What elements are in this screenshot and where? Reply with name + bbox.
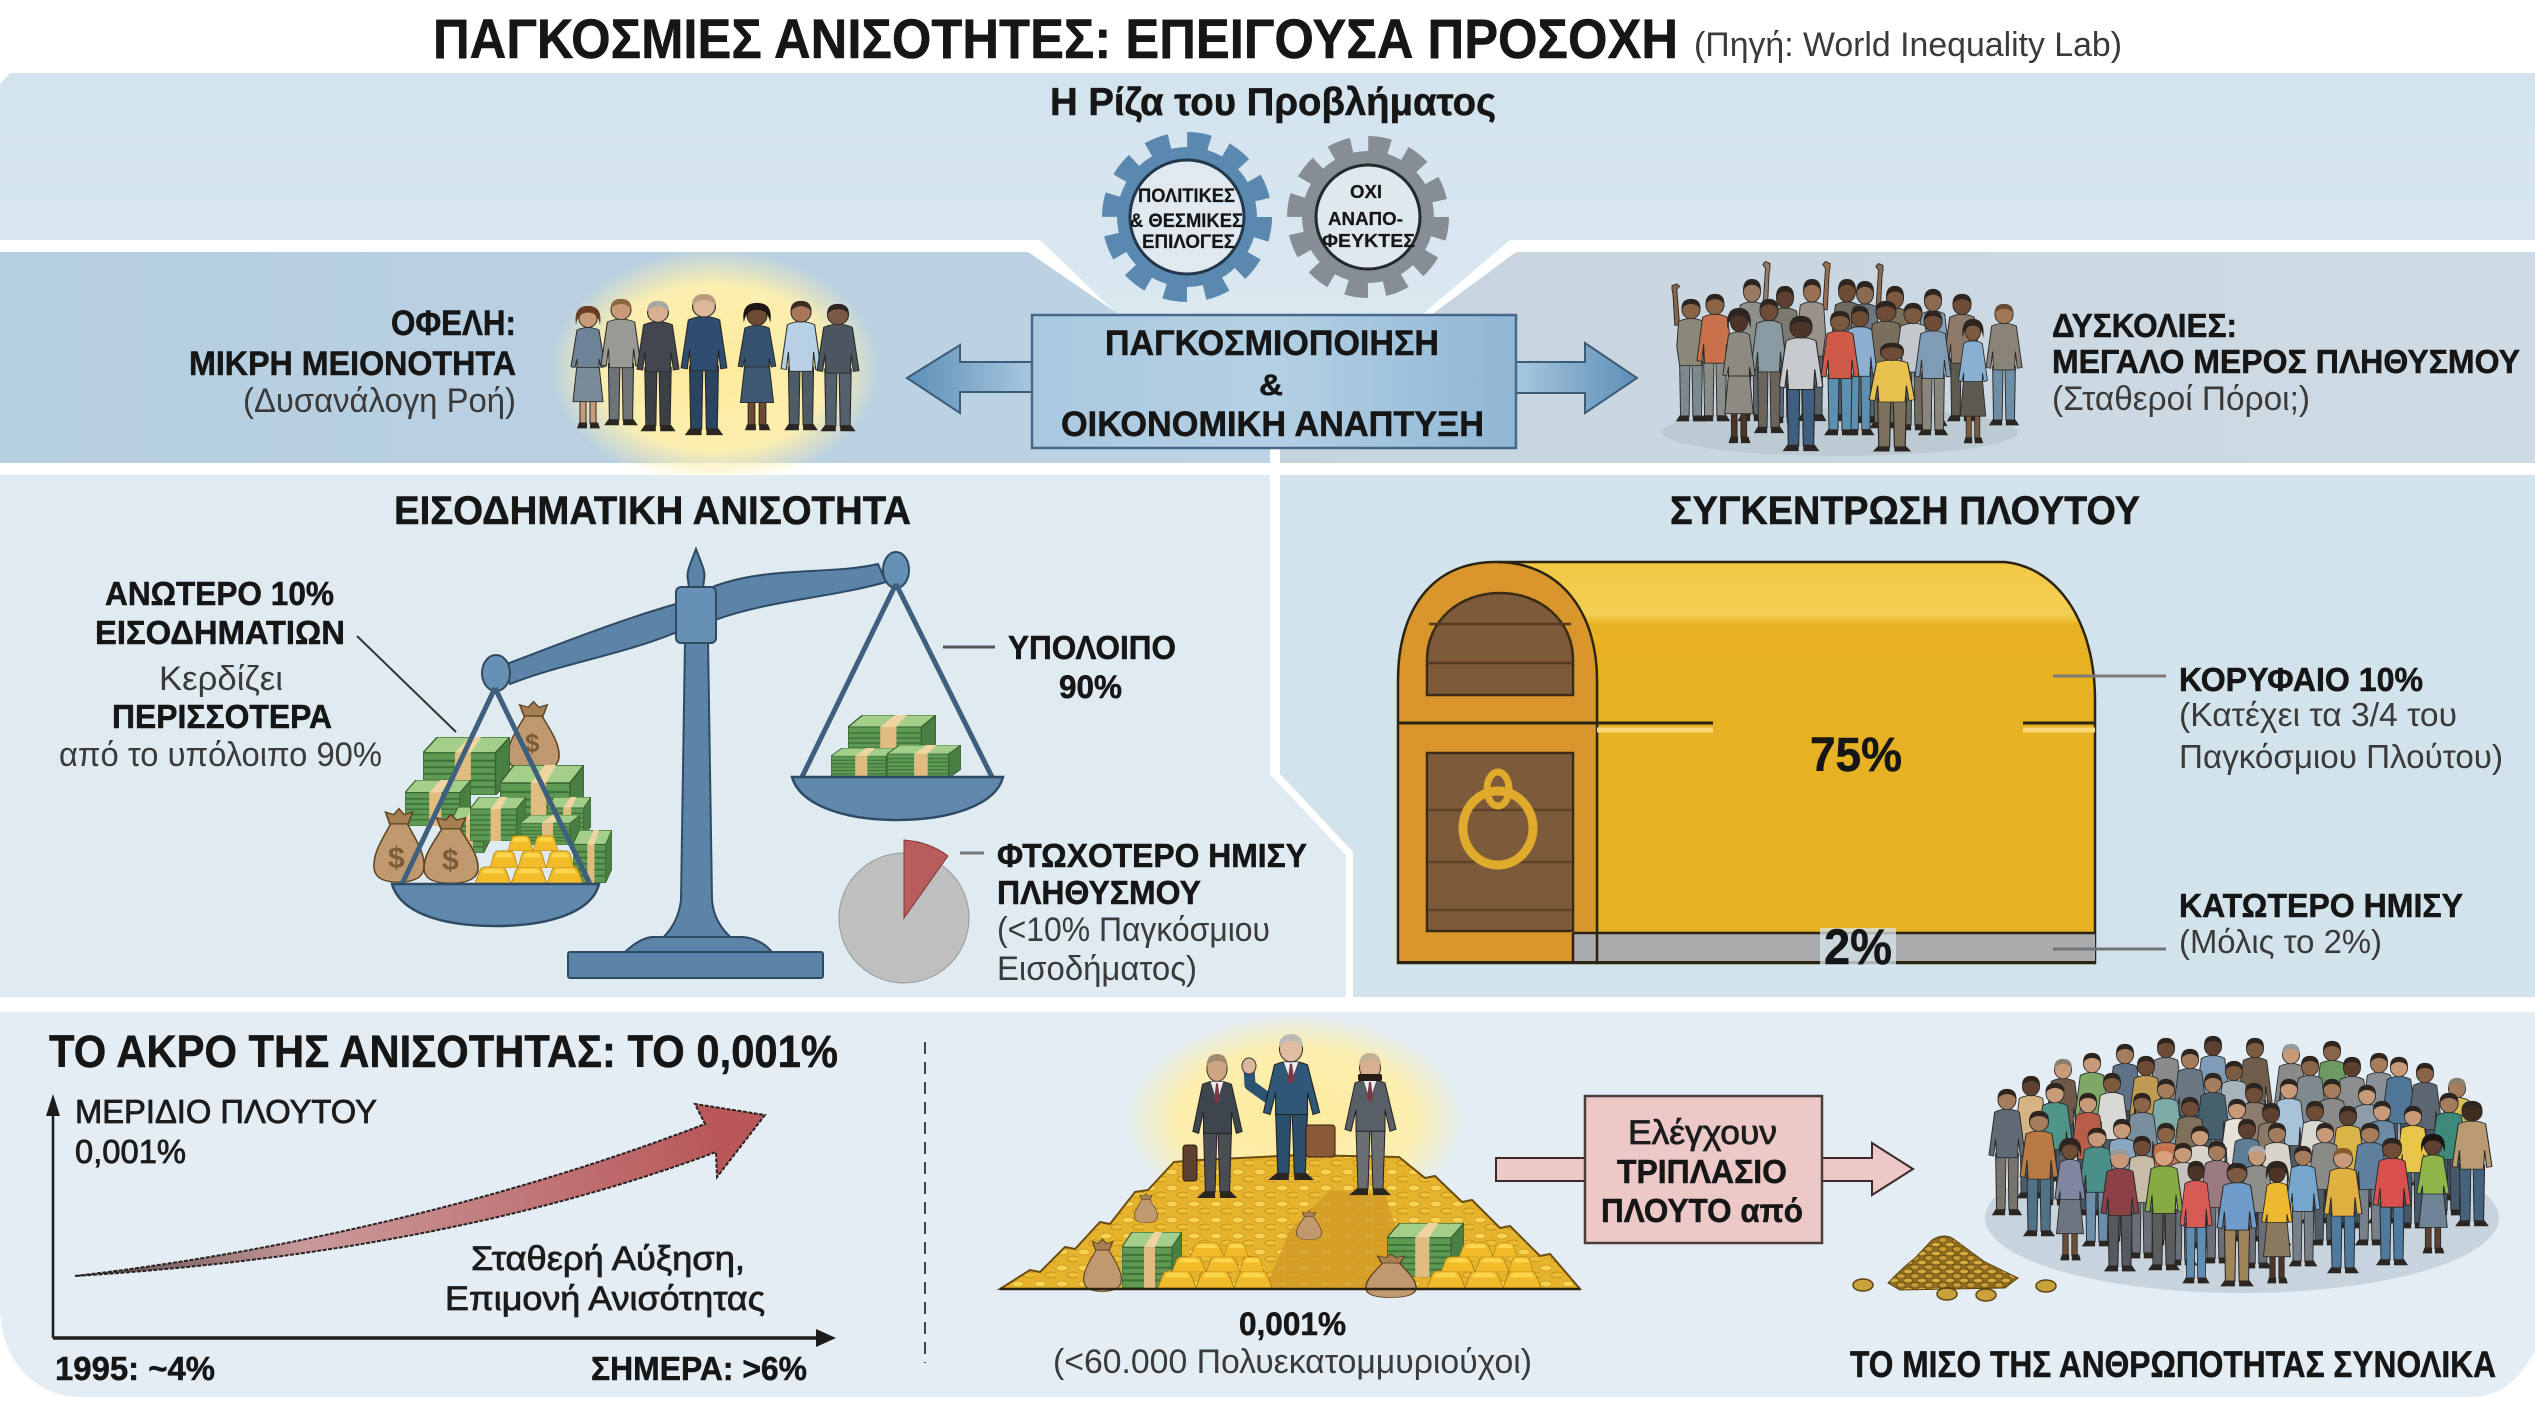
- arrow and box: control triple the wealth: [1496, 1096, 1913, 1243]
- arrow and box: control triple the wealth: ΠΛΟΥΤΟ από: [1601, 1192, 1803, 1229]
- text: elite caption: [1053, 1306, 1532, 1381]
- icon: treasure chest: 75%: [1810, 729, 1902, 782]
- chart: wealth share growth: ΣΗΜΕΡΑ: >6%: [591, 1350, 807, 1387]
- arrow: toward minority: [907, 345, 1034, 413]
- scale pole: [652, 640, 744, 948]
- chart: wealth share growth: 0,001%: [75, 1133, 186, 1170]
- text: top 10 percent income: από το υπόλοιπο 90%: [59, 736, 382, 774]
- money pile: heavy pan: $: [388, 842, 405, 875]
- icon: treasure chest: 2%: [1824, 919, 1892, 975]
- text: top 10 percent income: Κερδίζει: [159, 660, 283, 698]
- icon: pile of gold and money: [1000, 1155, 1580, 1298]
- icon: blue gear: ΠΟΛΙΤΙΚΕΣ: [1138, 186, 1235, 207]
- arrow and box: control triple the wealth: Ελέγχουν: [1628, 1114, 1777, 1152]
- text: top 10 percent income: [59, 575, 382, 774]
- text: elite caption: (<60.000 Πολυεκατομμυριούχοι): [1053, 1343, 1532, 1381]
- title: ΠΑΓΚΟΣΜΙΕΣ ΑΝΙΣΟΤΗΤΕΣ: ΕΠΕΙΓΟΥΣΑ ΠΡΟΣΟΧΗ: [433, 7, 1678, 70]
- benefits text: ΜΙΚΡΗ ΜΕΙΟΝΟΤΗΤΑ: [189, 345, 516, 383]
- icon: small coin pile: [1853, 1236, 2056, 1301]
- text: bottom half wealth: (Μόλις το 2%): [2179, 923, 2382, 960]
- icon: blue gear: & ΘΕΣΜΙΚΕΣ: [1130, 211, 1243, 232]
- knobs: [482, 552, 909, 691]
- benefits text: ΟΦΕΛΗ:: [391, 304, 516, 343]
- text: top 10 percent income: ΑΝΩΤΕΡΟ 10%: [105, 575, 334, 612]
- icon: treasure chest: [1398, 562, 2095, 975]
- heading: root of the problem: Η Ρίζα του Προβλήματος: [1050, 81, 1496, 124]
- text: top 10 percent wealth: (Κατέχει τα 3/4 του: [2179, 696, 2457, 733]
- text: poorest half: (<10% Παγκόσμιου: [997, 911, 1270, 949]
- text: remaining 90 percent: 90%: [1059, 669, 1122, 705]
- text: top 10 percent wealth: ΚΟΡΥΦΑΙΟ 10%: [2179, 661, 2423, 698]
- benefits text: [189, 304, 516, 420]
- icon: balance scale with money: [374, 549, 1003, 978]
- money pile: heavy pan: $: [525, 728, 540, 758]
- text: bottom half wealth: ΚΑΤΩΤΕΡΟ ΗΜΙΣΥ: [2179, 887, 2463, 924]
- panel: difficulties band: [1280, 252, 2535, 463]
- text: bottom half wealth: [2053, 887, 2463, 960]
- panel: root of the problem: [0, 73, 2535, 315]
- central box: globalisation and growth: ΠΑΓΚΟΣΜΙΟΠΟΙΗΣΗ: [1105, 324, 1439, 363]
- panel: wealth concentration: [1280, 475, 2535, 997]
- arrow: toward population: [1514, 343, 1637, 413]
- heading: wealth concentration: ΣΥΓΚΕΝΤΡΩΣΗ ΠΛΟΥΤΟΥ: [1670, 489, 2140, 533]
- chart: wealth share growth: 1995: ~4%: [55, 1350, 215, 1387]
- text: top 10 percent wealth: [2053, 661, 2503, 775]
- chart: wealth share growth: Σταθερή Αύξηση,: [471, 1240, 745, 1278]
- icon: grey gear: ΑΝΑΠΟ-: [1328, 209, 1403, 229]
- panel: the extreme of inequality: [0, 1012, 2535, 1397]
- icon: grey gear: [1297, 146, 1439, 288]
- text: poorest half: ΦΤΩΧΟΤΕΡΟ ΗΜΙΣΥ: [997, 837, 1307, 874]
- icon: grey gear: ΟΧΙ: [1350, 182, 1382, 202]
- panel: benefits band: [0, 250, 1270, 486]
- text: poorest half: [960, 837, 1307, 988]
- text: top 10 percent wealth: Παγκόσμιου Πλούτου): [2179, 738, 2503, 775]
- text: remaining 90 percent: [943, 629, 1176, 705]
- callout line: top 10 percent: [357, 636, 456, 732]
- benefits text: (Δυσανάλογη Ροή): [243, 382, 516, 420]
- panel: gears: [1112, 142, 1439, 292]
- money pile: light pan: [831, 715, 961, 778]
- icon: crowd of half of humanity: [1989, 1036, 2492, 1286]
- money pile: heavy pan: [374, 702, 612, 884]
- text: poorest half: ΠΛΗΘΥΣΜΟΥ: [997, 874, 1201, 911]
- chart: wealth share growth: Επιμονή Ανισότητας: [445, 1280, 765, 1318]
- icon: blue gear: [1112, 142, 1262, 292]
- heading: income inequality: ΕΙΣΟΔΗΜΑΤΙΚΗ ΑΝΙΣΟΤΗΤΑ: [394, 489, 911, 533]
- text: top 10 percent income: ΕΙΣΟΔΗΜΑΤΙΩΝ: [95, 614, 345, 651]
- difficulties text: (Σταθεροί Πόροι;): [2052, 380, 2310, 418]
- arrow and box: control triple the wealth: ΤΡΙΠΛΑΣΙΟ: [1617, 1153, 1787, 1190]
- icon: blue gear: ΕΠΙΛΟΓΕΣ: [1142, 232, 1235, 253]
- text: remaining 90 percent: ΥΠΟΛΟΙΠΟ: [1008, 629, 1176, 666]
- icon: small group of seven people: [571, 294, 859, 435]
- chart: wealth share growth: ΜΕΡΙΔΙΟ ΠΛΟΥΤΟΥ: [75, 1093, 377, 1130]
- icon: crowd shadow: [1662, 408, 2018, 456]
- heading: the extreme of inequality: ΤΟ ΑΚΡΟ ΤΗΣ ΑΝΙΣΟΤΗΤΑΣ: ΤΟ 0,001%: [49, 1026, 838, 1077]
- panel: income inequality: [0, 475, 1346, 997]
- icon: large crowd of people: [1672, 262, 2022, 452]
- icon: glow behind elite: [1125, 1015, 1465, 1225]
- title: (Πηγή: World Inequality Lab): [1694, 26, 2122, 64]
- chart: pie of poorest half: [839, 840, 969, 983]
- scale beam: [504, 564, 886, 684]
- icon: glow behind small minority: [550, 250, 880, 486]
- icon: crowd ellipse: [1985, 1143, 2499, 1293]
- difficulties text: [2052, 307, 2520, 418]
- difficulties text: ΜΕΓΑΛΟ ΜΕΡΟΣ ΠΛΗΘΥΣΜΟΥ: [2052, 343, 2520, 380]
- text: top 10 percent income: ΠΕΡΙΣΣΟΤΕΡΑ: [112, 698, 332, 735]
- chart: wealth share growth: [46, 1093, 836, 1387]
- money pile: heavy pan: $: [442, 844, 459, 877]
- central box: globalisation and growth: [1032, 315, 1516, 448]
- strings: [402, 584, 992, 884]
- pans: [392, 884, 599, 926]
- difficulties text: ΔΥΣΚΟΛΙΕΣ:: [2052, 307, 2237, 344]
- icon: grey gear: ΦΕΥΚΤΕΣ: [1322, 231, 1415, 251]
- central box: globalisation and growth: &: [1259, 369, 1283, 402]
- icon: three elite figures: [1183, 1034, 1396, 1198]
- text: elite caption: 0,001%: [1239, 1306, 1346, 1342]
- central box: globalisation and growth: ΟΙΚΟΝΟΜΙΚΗ ΑΝΑΠΤΥΞΗ: [1061, 405, 1484, 444]
- text: poorest half: Εισοδήματος): [997, 950, 1197, 988]
